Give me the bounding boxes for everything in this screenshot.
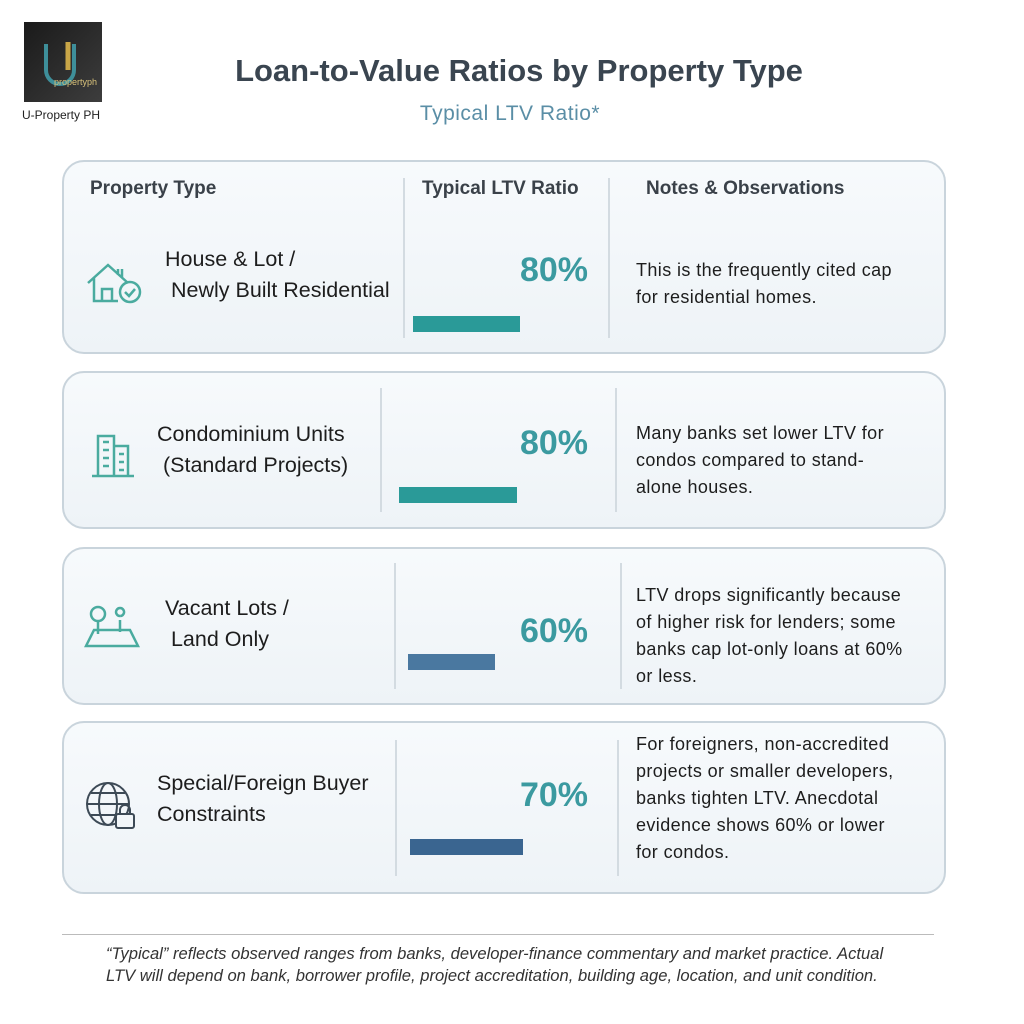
logo: U-Property PH: [22, 108, 100, 122]
label: (Standard Projects): [163, 453, 348, 477]
value: 60%: [520, 612, 588, 650]
icon: house: [87, 264, 142, 304]
note: alone houses.: [636, 477, 753, 497]
note: of higher risk for lenders; some: [636, 612, 896, 632]
label: Constraints: [157, 802, 266, 826]
label: Land Only: [171, 627, 269, 651]
title: Loan-to-Value Ratios by Property Type: [235, 53, 803, 88]
note: Many banks set lower LTV for: [636, 423, 884, 443]
note: For foreigners, non-accredited: [636, 734, 889, 754]
note: for residential homes.: [636, 287, 817, 307]
logo: [22, 22, 102, 122]
note: or less.: [636, 666, 697, 686]
note: banks tighten LTV. Anecdotal: [636, 788, 878, 808]
bar: [413, 316, 520, 332]
note: [636, 260, 892, 307]
panel: foreign buyer: [62, 721, 946, 894]
label: Newly Built Residential: [171, 278, 390, 302]
note: projects or smaller developers,: [636, 761, 894, 781]
panel: condo: [62, 371, 946, 529]
note: for condos.: [636, 842, 729, 862]
bar: [399, 487, 517, 503]
note: [636, 734, 894, 862]
icon: building: [92, 434, 134, 478]
bar: [410, 839, 523, 855]
header: property type: Property Type: [90, 178, 216, 199]
note: [636, 585, 903, 686]
footnote: LTV will depend on bank, borrower profile, project accreditation, building age, location, and unit condition.: [106, 966, 878, 985]
note: This is the frequently cited cap: [636, 260, 892, 280]
note: condos compared to stand-: [636, 450, 864, 470]
logo: propertyph: [54, 77, 97, 87]
panel: vacant lots: [62, 547, 946, 705]
note: LTV drops significantly because: [636, 585, 901, 605]
footnote: “Typical” reflects observed ranges from banks, developer-finance commentary and market practice. Actual: [106, 944, 883, 963]
icon: globe lock: [86, 782, 135, 829]
subtitle: Typical LTV Ratio*: [420, 102, 600, 125]
note: banks cap lot-only loans at 60%: [636, 639, 903, 659]
label: Condominium Units: [157, 422, 345, 446]
value: 80%: [520, 251, 588, 289]
label: [157, 771, 369, 826]
header: notes: Notes & Observations: [646, 178, 844, 199]
value: 70%: [520, 776, 588, 814]
label: House & Lot /: [165, 247, 295, 271]
footnote: [106, 944, 884, 985]
label: Vacant Lots /: [165, 596, 289, 620]
header: ltv: Typical LTV Ratio: [422, 178, 579, 199]
label: [165, 596, 289, 651]
panel: house & lot: [62, 160, 946, 354]
label: [165, 247, 390, 302]
label: [157, 422, 348, 477]
note: evidence shows 60% or lower: [636, 815, 885, 835]
value: 80%: [520, 424, 588, 462]
bar: [408, 654, 495, 670]
icon: land: [84, 606, 140, 648]
note: [636, 423, 884, 497]
label: Special/Foreign Buyer: [157, 771, 369, 795]
